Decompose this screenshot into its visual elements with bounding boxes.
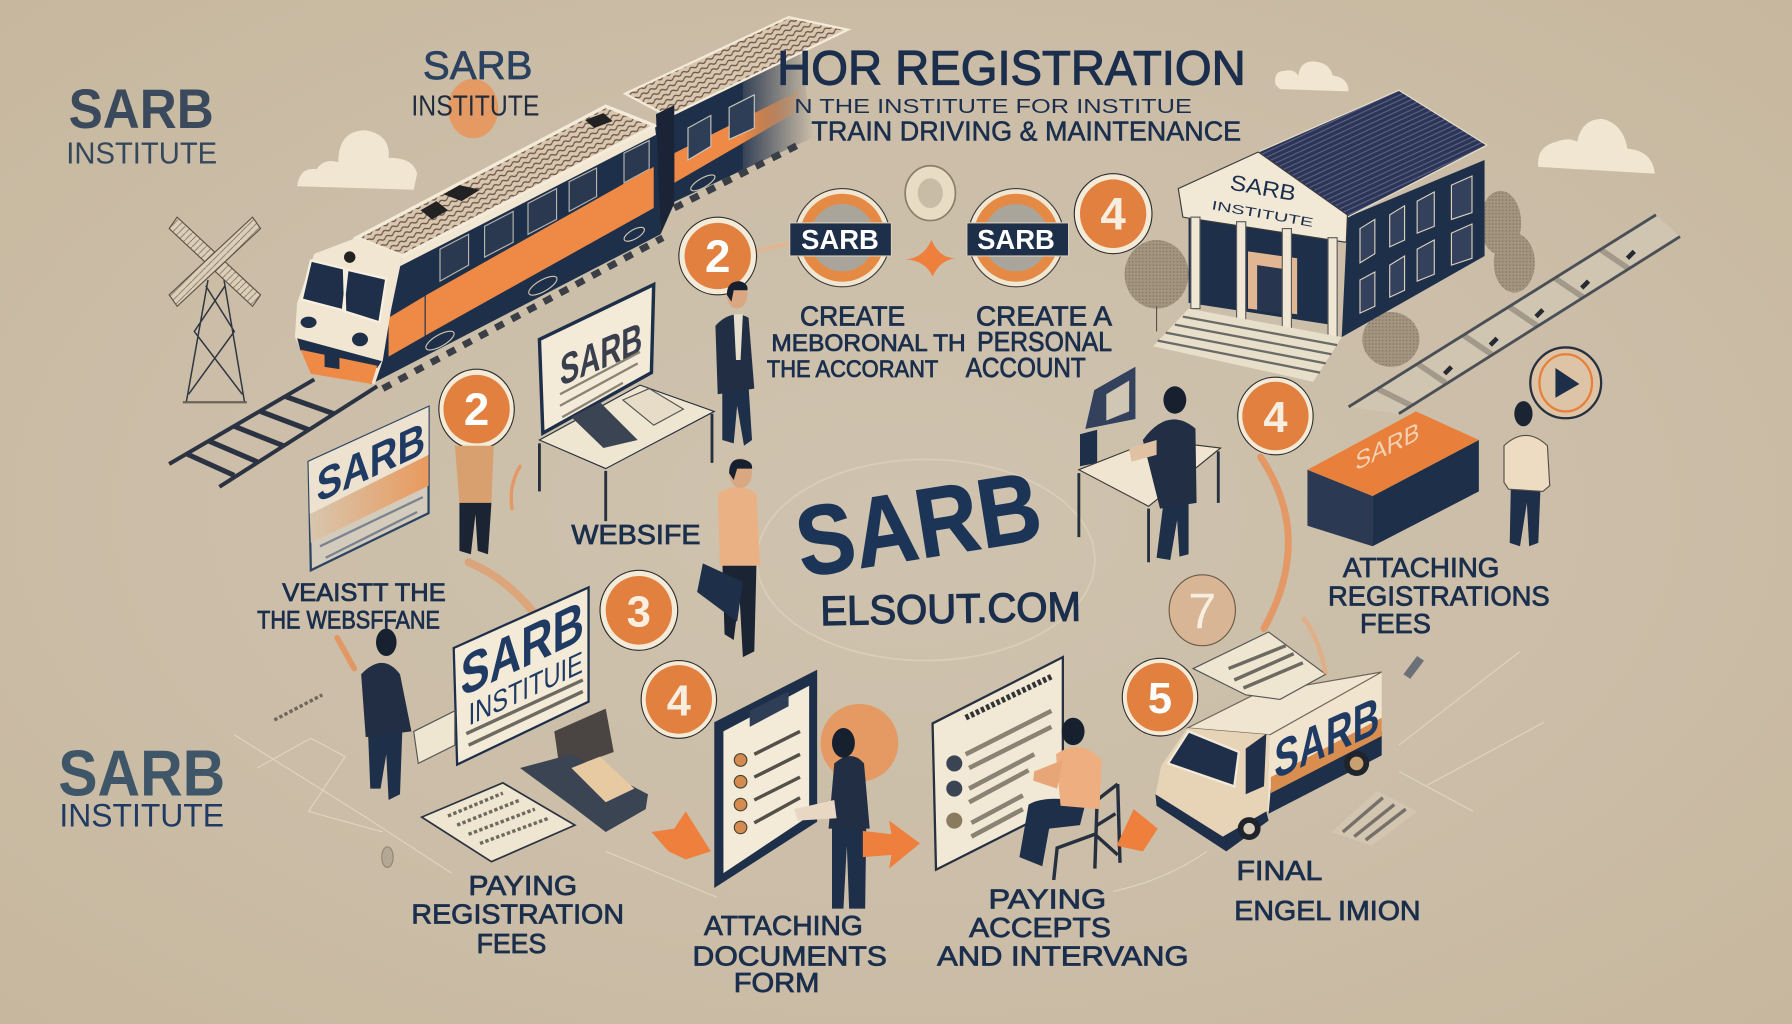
illustration: clipboard [714,670,817,888]
text: final [1234,855,1421,926]
train track left [169,379,377,487]
roof [357,106,655,256]
badge: 2 left: 2 [464,384,489,435]
logo: SARB Institute top centre: SARB [423,44,533,88]
text: create personal account right: PERSONAL [977,326,1112,357]
text: website: WEBSIFE [571,519,701,550]
text: paying accepts and interview [937,884,1189,972]
text: create personal account right: ACCOUNT [966,352,1086,383]
poster: SARB left: SARB [317,412,425,513]
pediment [1178,152,1347,242]
text: attaching documents form [693,910,887,998]
logo: SARB Institute bottom left: INSTITUTE [59,797,224,833]
van front [1155,728,1270,846]
roof vents [421,113,613,219]
person: orange shirt with briefcase [697,458,760,657]
logo: SARB Institute top left: INSTITUTE [66,135,217,170]
headlights [301,317,317,328]
center logo: SARB [788,451,1048,598]
cream eave [400,126,656,266]
person: at desk [1129,386,1197,560]
columns [1191,217,1337,338]
document beside poster [414,711,455,763]
arrow: orange left [651,811,711,859]
person: behind badge left [455,446,494,554]
illustration: track right [1347,215,1680,414]
text: paying registration fees: PAYING [469,870,577,901]
orange arrow above van [1303,617,1326,674]
cab lower [297,338,382,368]
title [777,43,1246,147]
badge: 4 lower [641,661,717,738]
illustration: desk with monitor: SARB [560,312,642,396]
text: paying registration fees [411,870,624,959]
rear carriage [625,17,848,203]
person: at clipboard [794,728,870,909]
person: navy back view [361,629,411,800]
badge: 4 top: 4 [1100,189,1126,240]
text: visit the website: THE WEBSFFANE [257,607,440,635]
stripe divider [424,286,426,343]
text: create personal account right: CREATE A [976,301,1113,332]
text: paying registration fees: FEES [477,928,546,959]
arrow: orange middle [863,821,920,869]
roundel: SARB right [967,189,1069,287]
roundel: SARB right: SARB [977,224,1055,255]
text: attaching documents form: ATTACHING [704,910,863,941]
poster: SARB Institute: INSTITUIE [469,644,583,732]
orange stripe [389,167,654,357]
badge: 3 [600,570,678,650]
roof [1258,90,1487,217]
poster: SARB Institute: SARB [461,587,584,709]
logo: SARB Institute top centre: INSTITUTE [411,90,539,122]
text: final: FINAL [1237,855,1322,886]
steps [1153,309,1342,382]
text: attaching documents form: DOCUMENTS [693,941,887,972]
text: attaching registrations fees: FEES [1360,608,1431,639]
curved orange connectors [337,457,1288,669]
text: create personal account left: MEBORONAL TH [771,330,966,357]
text: paying accepts and interview: PAYING [989,884,1106,915]
roundel: SARB left: SARB [801,224,879,255]
center logo [757,451,1095,661]
text: attaching registrations fees [1328,552,1550,639]
train [295,17,848,389]
illustration: document panel [933,657,1063,870]
illustration: delivery van [1155,672,1382,851]
text: paying registration fees: REGISTRATION [411,898,624,929]
title: HOR REGISTRATION [777,43,1246,96]
badge: 4 top [1074,174,1152,254]
person: right cream jacket [1504,401,1550,546]
logo: SARB Institute bottom left: SARB [58,736,225,809]
side wall [1342,160,1485,337]
badge: 2 top [679,217,757,295]
badge: 2 left [439,369,514,449]
text: paying accepts and interview: ACCEPTS [969,912,1111,943]
person: seated with chair [1019,718,1120,880]
text: visit the website [257,579,446,635]
coin icon [905,166,955,221]
illustration: orange SARB box: SARB [1355,416,1419,477]
illustration: institute building: INSTITUTE [1211,198,1314,230]
undercarriage [383,144,800,389]
text: create personal account right [966,301,1113,383]
badge: 7 [1169,575,1235,646]
van roof [1187,672,1382,735]
badge: 4 right: 4 [1263,394,1287,442]
center logo: ELSOUT.COM [820,584,1081,634]
badge: 3: 3 [627,588,651,636]
papers near van [1331,791,1417,846]
connector: badge 2 to roundel [754,242,794,251]
glow behind clipboard person [821,704,898,782]
poster: SARB Institute [454,587,589,765]
illustration: desk with computer [1079,366,1221,562]
text: visit the website: VEAISTT THE [282,579,446,607]
floor guide lines [234,651,1544,897]
icon: cloud right [1538,119,1655,174]
cab [295,238,402,384]
text: attaching registrations fees: REGISTRATIONS [1328,581,1550,612]
coupling [656,105,674,234]
text: create personal account left [767,301,966,383]
illustration: orange SARB box [1307,411,1479,546]
text: attaching registrations fees: ATTACHING [1343,552,1499,583]
logo: SARB Institute top centre [411,44,539,138]
windows [1360,176,1472,313]
badge: 2 top: 2 [705,231,730,282]
text: final: ENGEL IMION [1234,895,1421,926]
badge: 5 [1122,658,1198,736]
trees [1125,191,1535,367]
illustration: institute building [1125,90,1535,382]
wheels [1238,817,1261,840]
van lower [1155,794,1269,851]
badge: 4 lower: 4 [667,677,691,725]
poster: SARB left [309,407,429,570]
illustration: desk with monitor [539,285,714,521]
icon: roundel right [1530,347,1601,418]
roundel: SARB left [790,189,891,287]
arrow: between roundels [905,240,955,277]
icon: cloud left [297,130,417,190]
text: paying accepts and interview: AND INTERVANG [937,941,1189,972]
small scribble document [274,695,322,720]
logo: SARB Institute top left: SARB [69,77,214,140]
windscreen [302,261,386,322]
logo: SARB Institute top left [66,77,217,170]
window band [440,141,649,281]
wallet and box [520,709,648,832]
title: N THE INSTITUTE FOR INSTITUE [794,95,1192,118]
badge: 5: 5 [1148,675,1172,723]
swirl ornaments [423,172,717,354]
icon: railway crossing tower [169,217,261,402]
icon: cloud top [1275,61,1349,91]
pediment text: SARB [1228,170,1298,206]
small document icon right [1403,656,1424,679]
document: registration fees form [422,783,575,862]
front carriage body [371,123,661,384]
arrow: orange right [1117,809,1158,851]
badge: 4 right [1238,377,1313,455]
title: TRAIN DRIVING & MAINTENANCE [811,116,1241,147]
text: create personal account left: CREATE [800,301,905,332]
document on van [1193,632,1326,699]
front wall [1189,217,1337,326]
text: create personal account left: THE ACCORANT [767,356,939,383]
text: attaching documents form: FORM [734,967,819,998]
badge: 7: 7 [1188,583,1216,640]
logo: SARB Institute bottom left [58,736,225,833]
small clip icon [382,847,393,867]
person: standing top [715,281,754,446]
van body [1267,672,1382,811]
van text: SARB [1274,684,1379,791]
